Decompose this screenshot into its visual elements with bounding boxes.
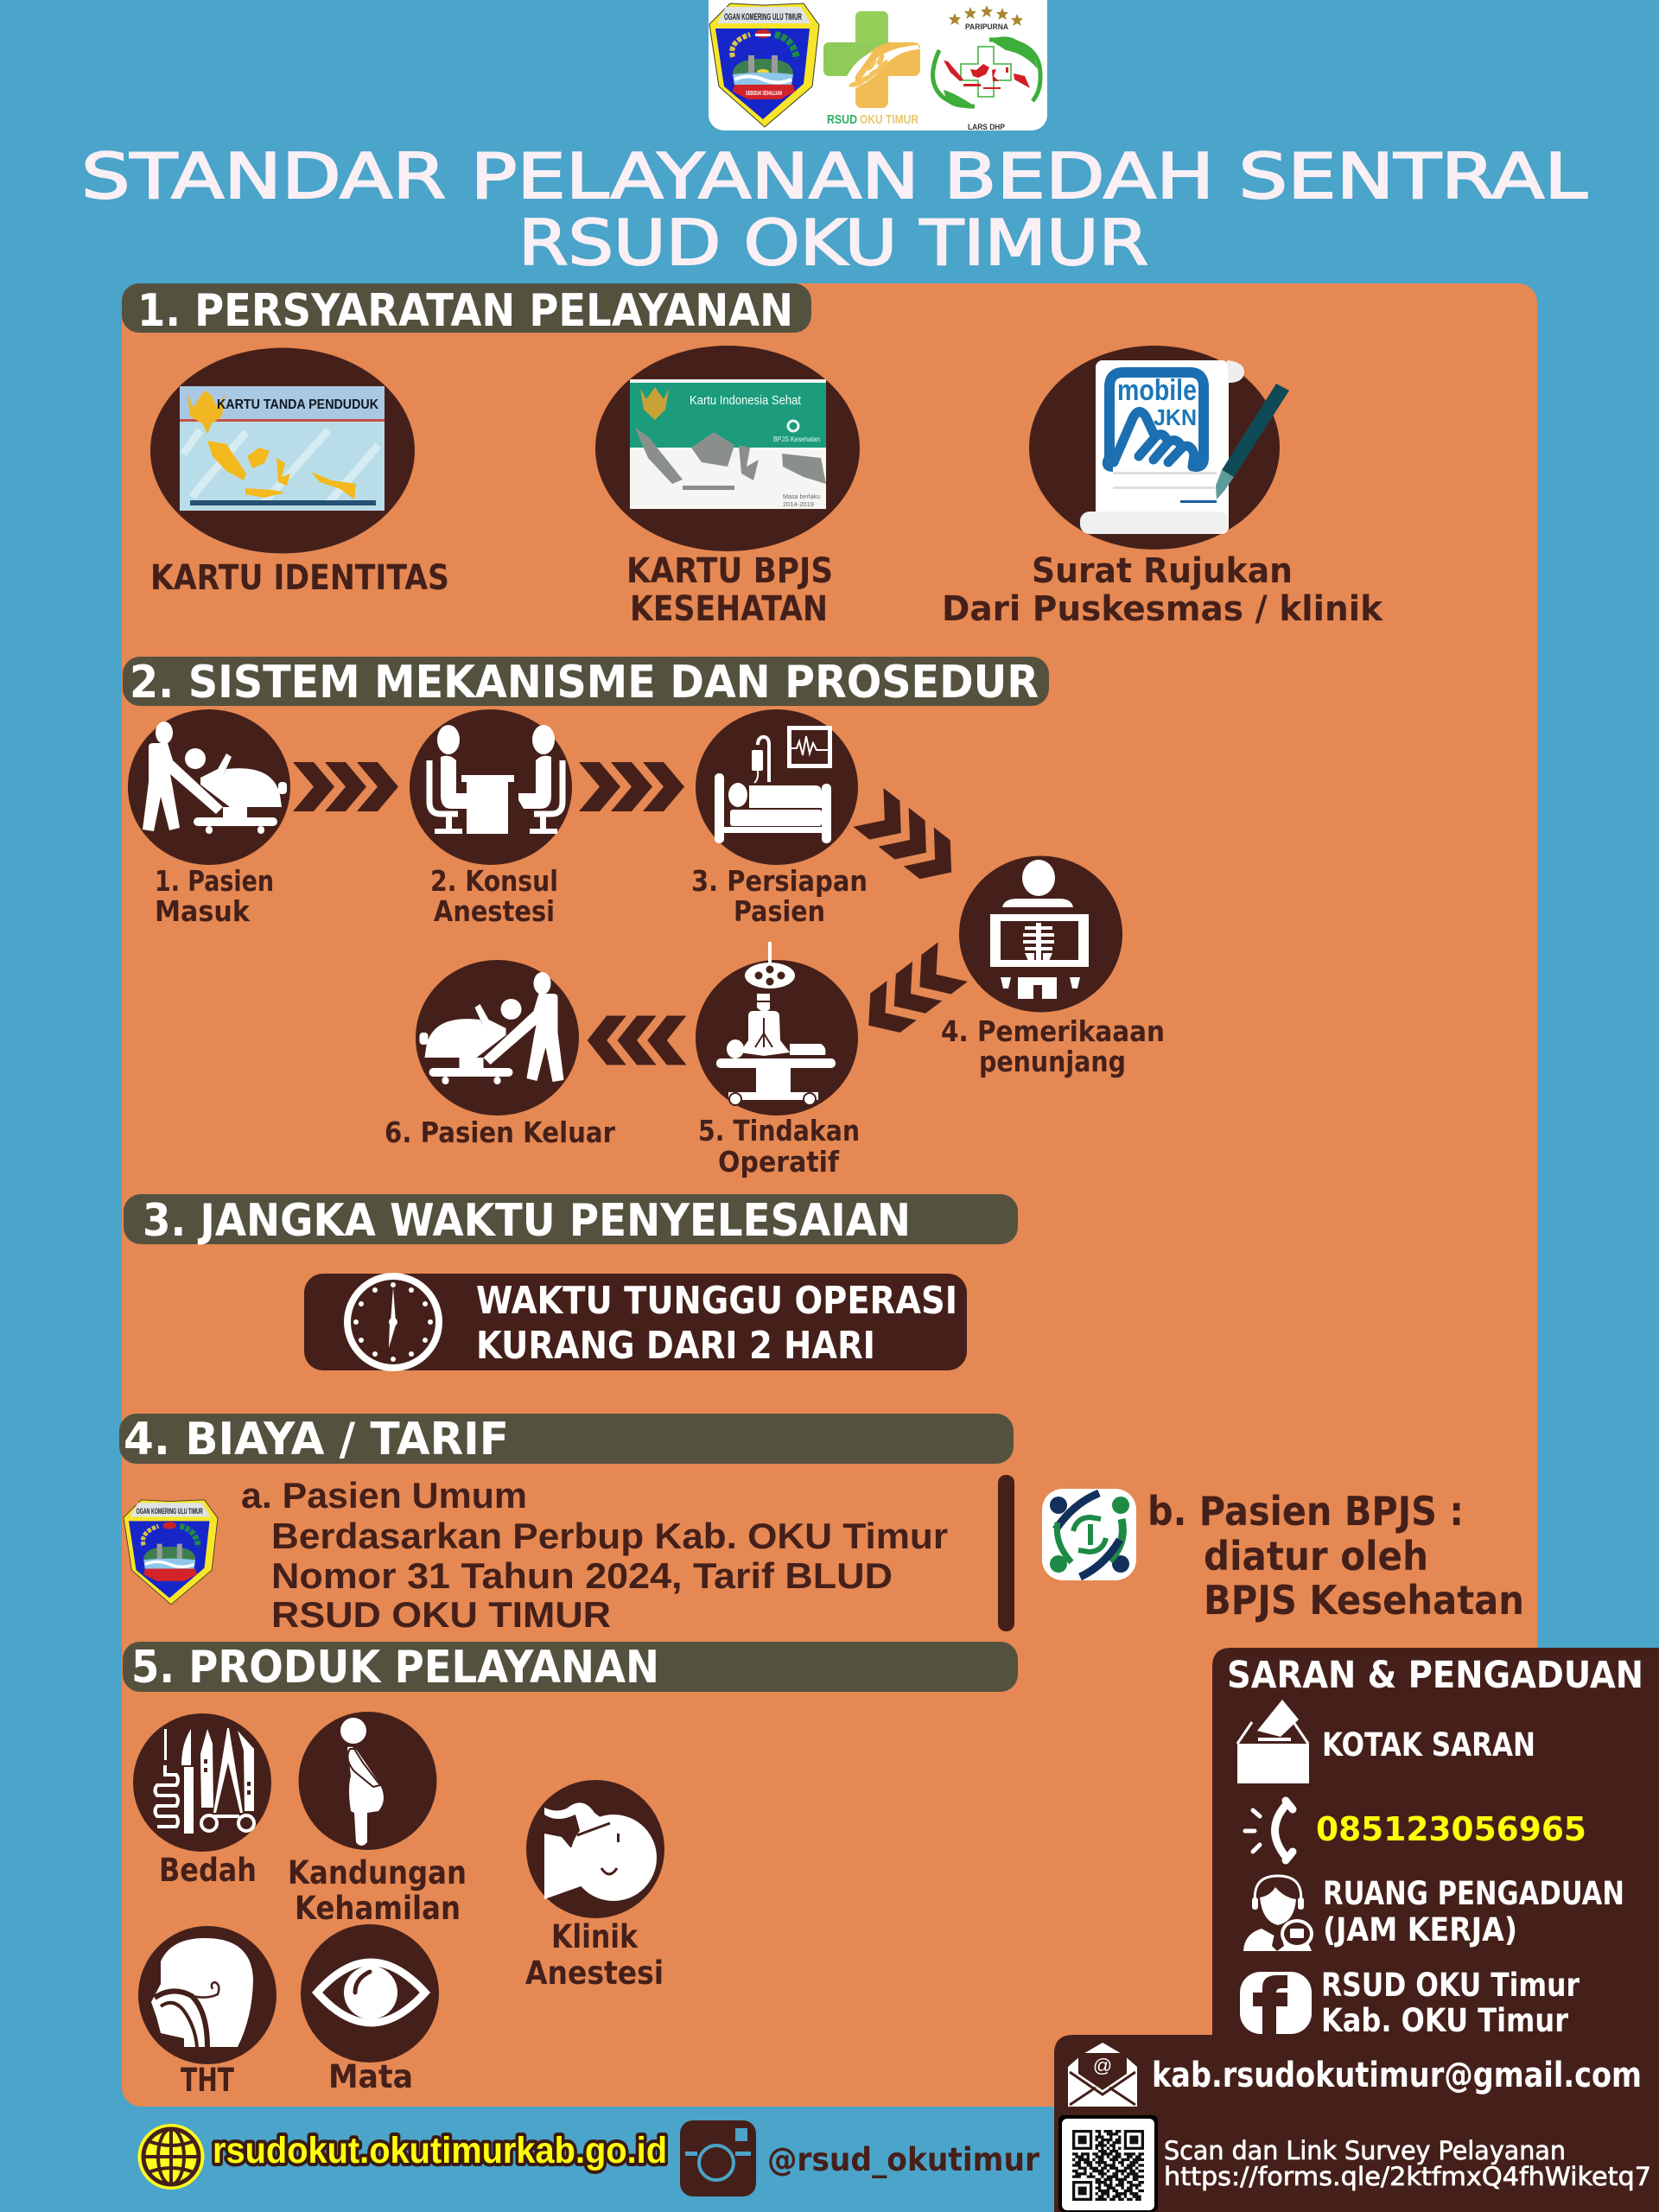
logo: Kabupaten OKU Timur shield <box>709 3 819 127</box>
label: Mata <box>328 2058 413 2095</box>
icon: patient with anesthesia mask <box>544 1802 657 1901</box>
label: 1. Pasien <box>155 864 274 898</box>
label <box>430 864 558 928</box>
label: KESEHATAN <box>630 589 828 629</box>
label: Operatif <box>718 1145 840 1179</box>
text: survey link: https://forms.qle/2ktfmxQ4fhWiketq7 <box>1164 2162 1651 2191</box>
logos strip <box>709 0 1047 131</box>
label: Bedah <box>159 1852 257 1889</box>
text: survey link <box>1164 2136 1651 2191</box>
text: phone number: 085123056965 <box>1316 1810 1586 1848</box>
icon: person pulling patient on gurney <box>420 972 563 1084</box>
icon: suggestion box <box>1237 1700 1309 1783</box>
text: Pasien BPJS <box>1147 1488 1524 1624</box>
label <box>691 864 868 928</box>
step 6: pasien keluar <box>385 960 616 1149</box>
icon: BPJS card: Masa berlaku <box>783 494 820 500</box>
arrow: step 1 to 2 <box>293 762 398 811</box>
title <box>81 140 1587 279</box>
icon: pregnant person <box>340 1718 384 1846</box>
label: Dari Puskesmas / klinik <box>942 589 1383 629</box>
step 4: pemeriksaan penunjang <box>941 855 1165 1078</box>
text: facebook account: Kab. OKU Timur <box>1321 2002 1569 2039</box>
label: 4. Pemerikaaan <box>941 1014 1165 1048</box>
label <box>941 1014 1165 1078</box>
icon: email envelope: @ <box>1093 2055 1112 2076</box>
icon: clock <box>344 1273 442 1371</box>
heading: 3. Jangka Waktu Penyelesaian: 3. JANGKA WAKTU PENYELESAIAN <box>143 1195 911 1247</box>
label: 2. Konsul <box>430 864 558 898</box>
icon: phone <box>1245 1801 1293 1860</box>
heading: 4. Biaya / Tarif <box>119 1414 1014 1465</box>
label: 6. Pasien Keluar <box>385 1116 616 1149</box>
text: Pasien Umum tariff: Berdasarkan Perbup Kab. OKU Timur <box>271 1516 948 1556</box>
label <box>288 1854 467 1927</box>
callout: waktu tunggu operasi <box>304 1273 967 1371</box>
logo: Paripurna LARS DHP <box>933 5 1040 131</box>
icon: complaint agent <box>1243 1876 1313 1951</box>
service: Bedah <box>133 1713 271 1889</box>
label: Anestesi <box>434 894 555 928</box>
text: facebook account <box>1321 1967 1580 2039</box>
label: Anestesi <box>525 1955 664 1992</box>
label <box>525 1918 664 1992</box>
callout text <box>476 1279 957 1368</box>
icon: BPJS card: BPJS Kesehatan <box>773 435 820 443</box>
title: STANDAR PELAYANAN BEDAH SENTRAL <box>81 140 1587 213</box>
step 3: persiapan pasien <box>691 709 868 928</box>
label <box>155 864 274 928</box>
requirement: Kartu Identitas <box>150 347 449 598</box>
step 5: tindakan operatif <box>696 942 860 1179</box>
main orange panel <box>122 283 1537 2107</box>
text: survey link: Scan dan Link Survey Pelayanan <box>1164 2136 1566 2165</box>
callout text: WAKTU TUNGGU OPERASI <box>476 1279 957 1323</box>
label: KARTU BPJS <box>626 551 833 591</box>
label <box>698 1114 860 1179</box>
label <box>626 551 833 629</box>
text: Pasien BPJS: b. Pasien BPJS : <box>1147 1488 1464 1535</box>
arrow: step 2 to 3 <box>579 762 684 811</box>
arrow: step 3 to 4 <box>853 788 967 892</box>
text: instagram handle: @rsud_okutimur <box>767 2141 1040 2178</box>
service: Mata <box>301 1924 439 2095</box>
icon: Kabupaten OKU Timur shield small <box>124 1500 218 1605</box>
icon: Mobile JKN referral scroll and pen: mobile <box>1117 374 1197 407</box>
label: Masuk <box>155 894 251 928</box>
icon: Kabupaten OKU Timur shield small: OGAN KOMERING ULU TIMUR <box>137 1507 203 1516</box>
icon: email envelope <box>1068 2043 1137 2107</box>
icon: instagram <box>680 2120 756 2196</box>
title: RSUD OKU TIMUR <box>518 207 1148 279</box>
icon: BPJS logo <box>1042 1489 1136 1580</box>
icon: KTP card: KARTU TANDA PENDUDUK <box>217 397 378 412</box>
icon: Mobile JKN referral scroll and pen <box>1080 360 1289 534</box>
text: ruang pengaduan <box>1323 1875 1624 1948</box>
text: website: rsudokut.okutimurkab.go.id <box>213 2130 667 2171</box>
arrow: step 5 to 6 <box>588 1016 686 1065</box>
icon: eye <box>317 1962 425 2023</box>
logo: RSUD OKU Timur cross: OKU TIMUR <box>860 112 918 127</box>
icon: surgery lamp, surgeon and table <box>716 942 836 1105</box>
heading: 1. Persyaratan Pelayanan: 1. PERSYARATAN PELAYANAN <box>137 285 793 337</box>
label: Pasien <box>734 894 825 928</box>
requirement: Surat Rujukan <box>942 346 1383 629</box>
label: Surat Rujukan <box>1032 551 1293 591</box>
requirement: Kartu BPJS Kesehatan <box>595 346 860 629</box>
icon: facebook <box>1240 1972 1312 2034</box>
icon: two people at table <box>429 725 563 834</box>
step 1: pasien masuk <box>128 709 290 928</box>
icon: patient in bed with monitor <box>715 726 832 843</box>
icon: surgical tools <box>156 1728 254 1834</box>
icon: head profile airway <box>151 1938 253 2047</box>
service: Kandungan Kehamilan <box>288 1712 467 1927</box>
heading: 2. Sistem Mekanisme dan Prosedur: 2. SISTEM MEKANISME DAN PROSEDUR <box>130 657 1039 709</box>
label: THT <box>181 2062 235 2099</box>
logo: RSUD OKU Timur cross <box>823 11 920 127</box>
text: Pasien Umum tariff: Nomor 31 Tahun 2024, Tarif BLUD <box>271 1555 893 1596</box>
logo: Paripurna LARS DHP: PARIPURNA <box>965 22 1008 31</box>
heading: 4. Biaya / Tarif: 4. BIAYA / TARIF <box>124 1414 509 1465</box>
icon: KTP card <box>180 386 385 511</box>
label: 3. Persiapan <box>691 864 868 898</box>
icon: BPJS card <box>630 379 826 509</box>
text: Pasien Umum tariff: RSUD OKU TIMUR <box>271 1594 611 1635</box>
label: Kehamilan <box>295 1890 461 1927</box>
panel: saran dan pengaduan <box>1212 1648 1659 2074</box>
text: facebook account: RSUD OKU Timur <box>1321 1967 1580 2004</box>
callout text: KURANG DARI 2 HARI <box>476 1324 875 1368</box>
logo: Kabupaten OKU Timur shield: OGAN KOMERING ULU TIMUR <box>724 12 802 22</box>
icon: person pushing patient on gurney <box>143 721 287 834</box>
service: Klinik Anestesi <box>525 1780 664 1992</box>
label: KARTU IDENTITAS <box>150 558 449 598</box>
service: THT <box>138 1926 276 2099</box>
logo: Kabupaten OKU Timur shield: SEBIDUK SEHALUAN <box>746 91 782 97</box>
text: Pasien Umum tariff: a. Pasien Umum <box>241 1475 527 1516</box>
text: ruang pengaduan: (JAM KERJA) <box>1323 1911 1517 1948</box>
text: Pasien BPJS: diatur oleh <box>1204 1533 1428 1580</box>
text: Pasien BPJS: BPJS Kesehatan <box>1204 1577 1524 1624</box>
text: Pasien Umum tariff <box>241 1475 948 1635</box>
icon: globe <box>138 2124 204 2190</box>
text: kotak saran: KOTAK SARAN <box>1322 1726 1535 1764</box>
icon: BPJS card: Kartu Indonesia Sehat <box>690 393 802 408</box>
step 2: konsul anestesi <box>410 709 572 928</box>
arrow: step 4 to 5 <box>854 943 968 1045</box>
label: Kandungan <box>288 1854 467 1891</box>
panel: email and survey <box>1054 2035 1659 2212</box>
icon: QR code <box>1058 2115 1158 2212</box>
label: 5. Tindakan <box>698 1114 860 1147</box>
icon: Mobile JKN referral scroll and pen: JKN <box>1154 404 1197 430</box>
icon: x-ray <box>990 860 1089 999</box>
icon: BPJS card: 2014-2019 <box>783 502 814 508</box>
label <box>942 551 1383 629</box>
label: Klinik <box>551 1918 639 1955</box>
heading: 5. Produk Pelayanan: 5. PRODUK PELAYANAN <box>131 1642 659 1694</box>
heading: 5. Produk Pelayanan <box>123 1642 1018 1694</box>
label: penunjang <box>979 1045 1126 1078</box>
logo: RSUD OKU Timur cross: RSUD <box>827 112 857 127</box>
logo: Paripurna LARS DHP: LARS DHP <box>968 123 1005 131</box>
